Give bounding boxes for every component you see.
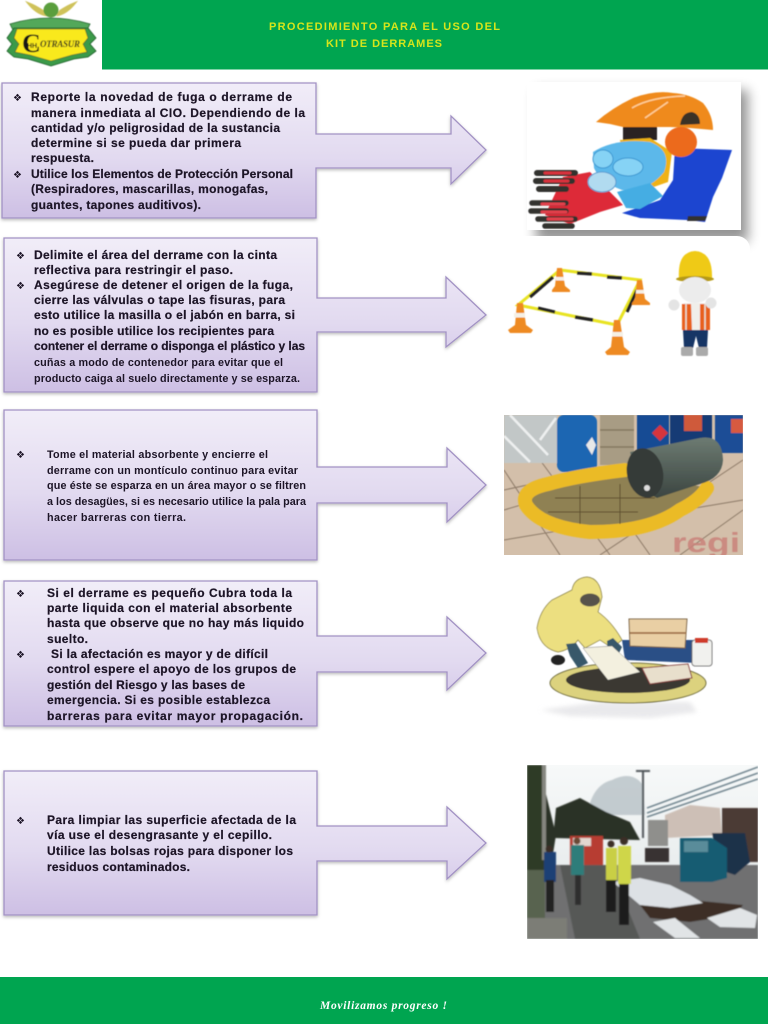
header band [102,0,768,70]
panel: step 4 cover the liquid: parte liquida con el material absorbente [47,601,292,615]
panel: step 1 report and PPE: determine si se pueda dar primera [31,136,241,150]
panel: step 3 absorbent material: ❖ [16,450,25,461]
panel: step 3 absorbent material [4,410,486,560]
panel: step 5 clean the surface [4,771,486,915]
panel: step 4 cover the liquid: Si el derrame es pequeño Cubra toda la [47,586,292,600]
panel: step 4 cover the liquid: barreras para evitar mayor propagación. [47,709,303,723]
panel: step 2 delimit area: Delimite el área del derrame con la cinta [34,248,277,262]
panel: step 4 cover the liquid: Si la afectación es mayor y de difícil [51,647,268,661]
panel: step 5 clean the surface: vía use el desengrasante y el cepillo. [47,828,272,842]
panel: step 2 delimit area: no es posible utilice los recipientes para [34,324,274,338]
panel: step 3 absorbent material: que éste se esparza en un área mayor o se filtren [47,480,306,492]
panel: step 2 delimit area: reflectiva para restringir el paso. [34,263,233,277]
footer slogan: Movilizamos progreso ! [319,1000,447,1012]
panel: step 2 delimit area: ❖ [16,251,25,262]
panel: step 2 delimit area [4,238,486,392]
panel: step 4 cover the liquid: control espere el apoyo de los grupos de [47,662,296,676]
panel: step 1 report and PPE: Reporte la novedad de fuga o derrame de [31,90,292,104]
panel: step 1 report and PPE: cantidad y/o peligrosidad de la sustancia [31,121,280,135]
panel: step 2 delimit area: contener el derrame o disponga el plástico y las [34,339,305,353]
panel: step 2 delimit area: Asegúrese de detener el origen de la fuga, [34,278,293,292]
panel: step 3 absorbent material: derrame con un montículo continuo para evitar [47,465,299,477]
panel: step 5 clean the surface: residuos contaminados. [47,860,190,874]
panel: step 4 cover the liquid [4,581,486,726]
image: road cleanup scene [527,765,758,939]
panel: step 3 absorbent material: Tome el material absorbente y encierre el [47,449,268,461]
panel: step 1 report and PPE: respuesta. [31,151,94,165]
panel: step 1 report and PPE: (Respiradores, mascarillas, monogafas, [31,182,268,196]
panel: step 1 report and PPE: guantes, tapones auditivos). [31,198,201,212]
panel: step 1 report and PPE [2,83,486,218]
panel: step 1 report and PPE: Utilice los Elementos de Protección Personal [31,167,293,181]
panel: step 3 absorbent material: hacer barreras con tierra. [47,512,186,524]
logo: Cotrasur [7,2,96,66]
panel: step 4 cover the liquid: hasta que observe que no hay más liquido [47,616,304,630]
logo: Cotrasur: HH [27,43,37,50]
panel: step 2 delimit area: esto utilice la masilla o el jabón en barra, si [34,308,295,322]
panel: step 4 cover the liquid: ❖ [16,650,25,661]
panel: step 2 delimit area: ❖ [16,281,25,292]
panel: step 5 clean the surface: Para limpiar las superficie afectada de la [47,813,296,827]
panel: step 5 clean the surface: Utilice las bolsas rojas para disponer los [47,844,293,858]
panel: step 4 cover the liquid: emergencia. Si es posible establezca [47,693,270,707]
title: KIT DE DERRAMES [326,38,442,50]
panel: step 1 report and PPE: ❖ [13,93,22,104]
logo: Cotrasur: C [22,29,41,58]
image: spill boom around leaking drum: regi [672,527,740,558]
panel: step 4 cover the liquid: suelto. [47,632,88,646]
image: barrier cones and worker [504,236,750,368]
logo: Cotrasur: OTRASUR [40,39,80,49]
title [269,21,500,50]
image: personal protective equipment [527,82,748,242]
image: spill boom around leaking drum [504,415,743,558]
image: worker in hazmat suit with spill kit [537,577,712,718]
panel: step 1 report and PPE: manera inmediata al CIO. Dependiendo de la [31,106,305,120]
panel: step 4 cover the liquid: gestión del Riesgo y las bases de [47,678,245,692]
panel: step 2 delimit area: cierre las válvulas o tape las fisuras, para [34,293,285,307]
panel: step 3 absorbent material: a los desagües, si es necesario utilice la pala para [47,496,307,508]
title: PROCEDIMIENTO PARA EL USO DEL [269,21,500,33]
panel: step 2 delimit area: producto caiga al suelo directamente y se esparza. [34,373,300,385]
panel: step 5 clean the surface: ❖ [16,816,25,827]
panel: step 2 delimit area: cuñas a modo de contenedor para evitar que el [34,357,283,369]
panel: step 1 report and PPE: ❖ [13,170,22,181]
footer band [0,977,768,1024]
panel: step 4 cover the liquid: ❖ [16,589,25,600]
